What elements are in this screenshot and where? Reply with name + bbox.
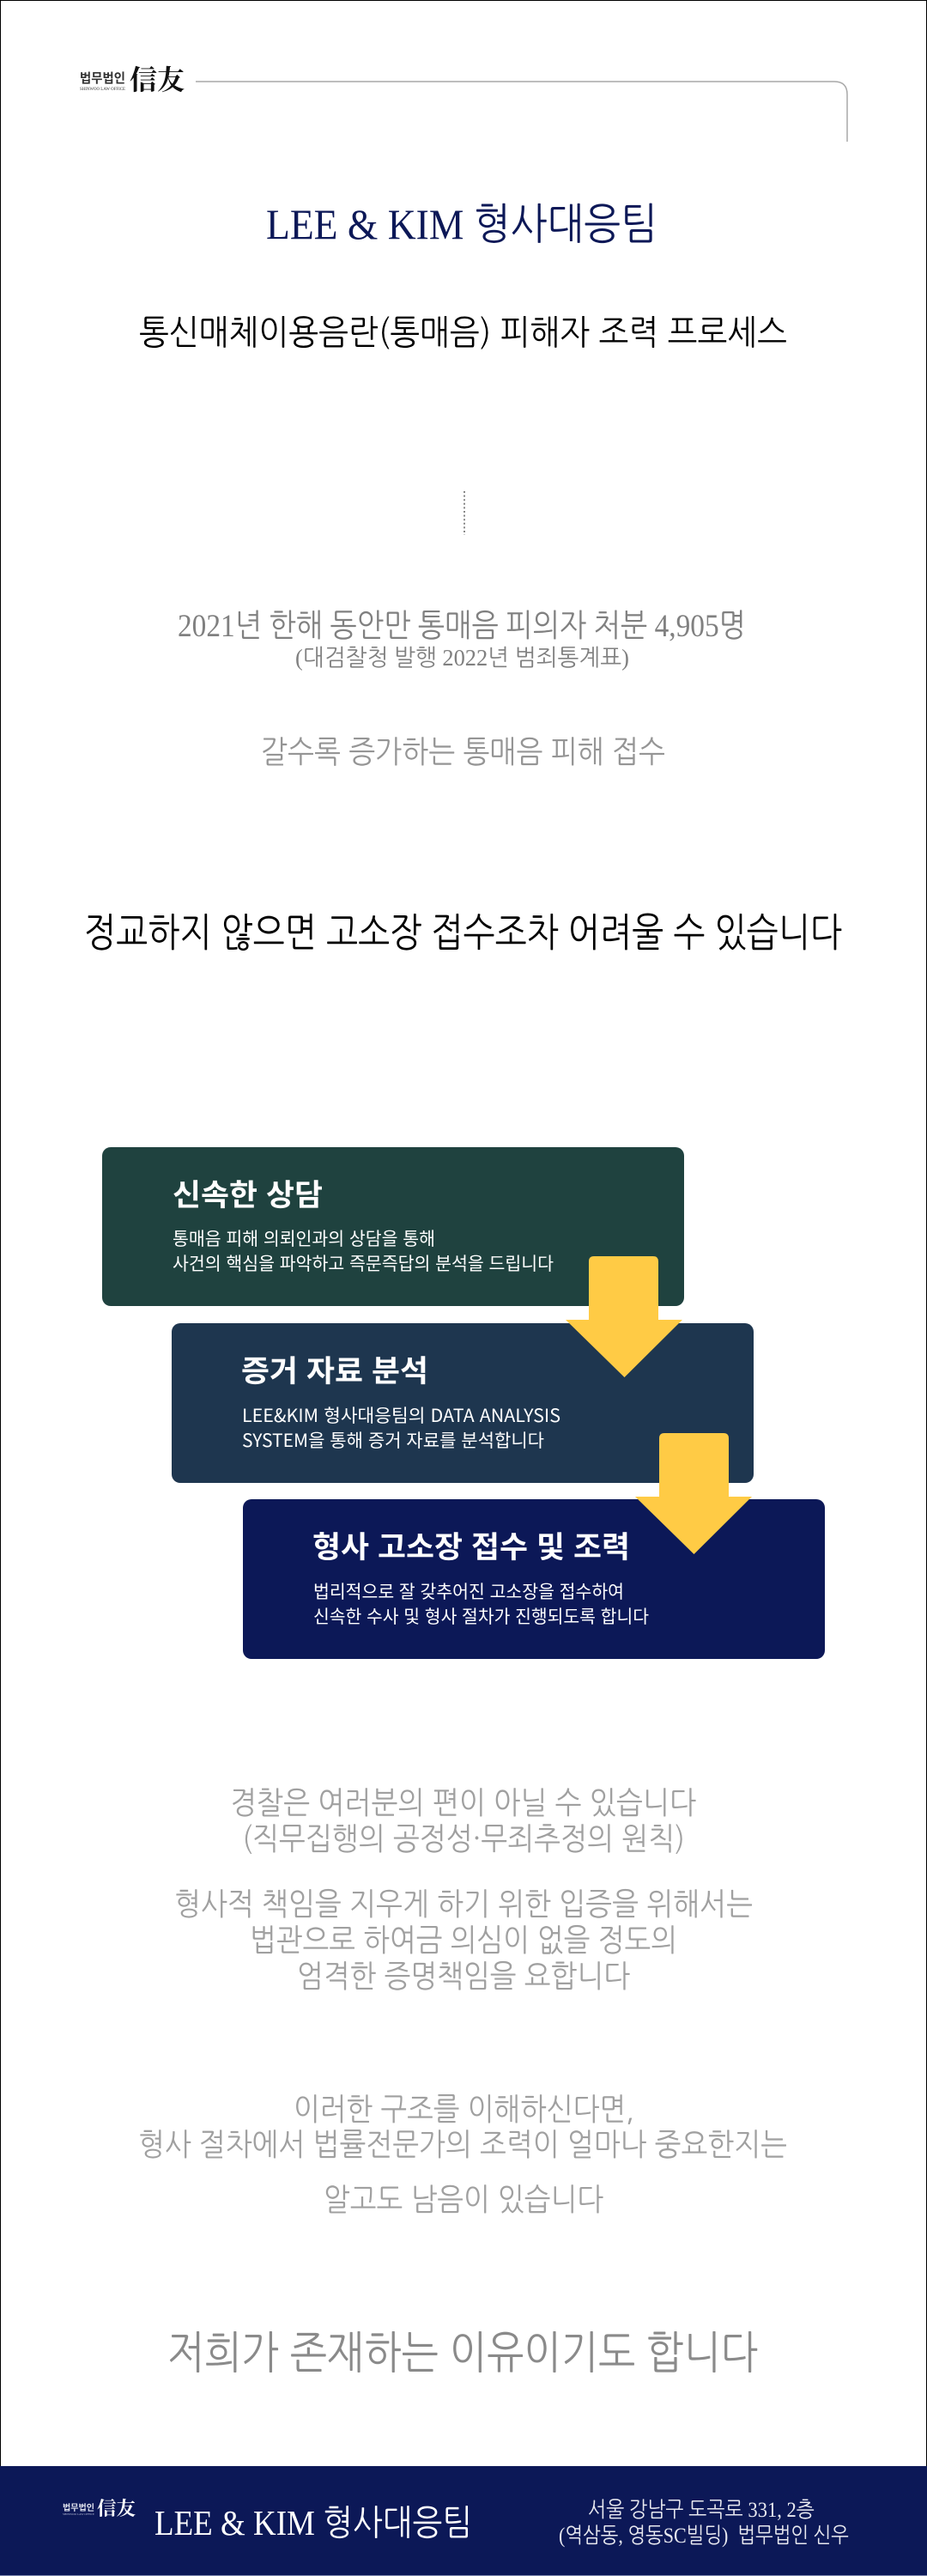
burden of proof text block [174, 1888, 753, 1992]
subtitle: 통신매체이용음란(통매음) 피해자 조력 프로세스 [139, 315, 787, 349]
footer logo [63, 2494, 136, 2521]
footer [0, 2466, 927, 2576]
panel: step 1 consultation [102, 1147, 684, 1306]
header logo: 법무법인 [80, 69, 125, 87]
panel: step 1 consultation: 사건의 핵심을 파악하고 즉문즉답의 분석을 드립니다 [173, 1250, 554, 1276]
arrow: step 2 to step 3 [635, 1433, 752, 1554]
expert help text block: 이러한 구조를 이해하신다면, [294, 2094, 634, 2125]
panel: step 2 evidence analysis: LEE&KIM 형사대응팀의 DATA ANALYSIS [242, 1402, 560, 1428]
title: LEE & KIM 형사대응팀 [266, 200, 657, 248]
footer address: 서울 강남구 도곡로 331, 2층 [588, 2499, 815, 2522]
burden of proof text block: 형사적 책임을 지우게 하기 위한 입증을 위해서는 [174, 1888, 753, 1920]
panel: step 2 evidence analysis: 증거 자료 분석 [241, 1347, 428, 1391]
panel: step 3 complaint filing: 신속한 수사 및 형사 절차가 진행되도록 합니다 [313, 1603, 649, 1629]
header logo [80, 58, 185, 98]
footer address [559, 2499, 849, 2548]
expert help text block [138, 2094, 787, 2215]
process steps [102, 1147, 825, 1659]
header logo: 信友 [130, 58, 185, 98]
burden of proof text block: 법관으로 하여금 의심이 없을 정도의 [250, 1924, 677, 1956]
panel: step 3 complaint filing: 법리적으로 잘 갖추어진 고소장을 접수하여 [313, 1578, 624, 1604]
increasing reports text: 갈수록 증가하는 통매음 피해 접수 [261, 737, 665, 768]
police text block [230, 1788, 696, 1855]
panel: step 2 evidence analysis: SYSTEM을 통해 증거 자료를 분석합니다 [242, 1427, 544, 1453]
statistic text: 2021년 한해 동안만 통매음 피의자 처분 4,905명 [178, 609, 746, 644]
panel: step 1 consultation: 신속한 상담 [173, 1171, 323, 1215]
expert help text block: 형사 절차에서 법률전문가의 조력이 얼마나 중요한지는 [138, 2129, 787, 2160]
expert help text block: 알고도 남음이 있습니다 [324, 2184, 603, 2215]
arrow: step 1 to step 2 [566, 1256, 682, 1377]
closing statement: 저희가 존재하는 이유이기도 합니다 [167, 2330, 758, 2375]
panel: step 3 complaint filing [243, 1499, 825, 1659]
footer logo: SHINWOO LAW OFFICE [63, 2512, 94, 2516]
police text block: 경찰은 여러분의 편이 아닐 수 있습니다 [230, 1788, 696, 1819]
statistic text [178, 609, 746, 671]
panel: step 1 consultation: 통매음 피해 의뢰인과의 상담을 통해 [173, 1225, 435, 1251]
footer logo: 信友 [97, 2494, 136, 2521]
header logo: SHINWOO LAW OFFICE [80, 88, 125, 92]
dotted divider [464, 491, 465, 535]
burden of proof text block: 엄격한 증명책임을 요합니다 [297, 1960, 630, 1992]
footer title: LEE & KIM 형사대응팀 [154, 2503, 472, 2543]
footer address: (역삼동, 영동SC빌딩) 법무법인 신우 [559, 2524, 849, 2548]
footer logo: 법무법인 [63, 2500, 94, 2513]
panel: step 2 evidence analysis [172, 1323, 754, 1483]
statistic text: (대검찰청 발행 2022년 범죄통계표) [295, 645, 629, 671]
police text block: (직무집행의 공정성·무죄추정의 원칙) [242, 1824, 685, 1855]
panel: step 3 complaint filing: 형사 고소장 접수 및 조력 [312, 1523, 630, 1567]
header bracket line [196, 82, 847, 142]
